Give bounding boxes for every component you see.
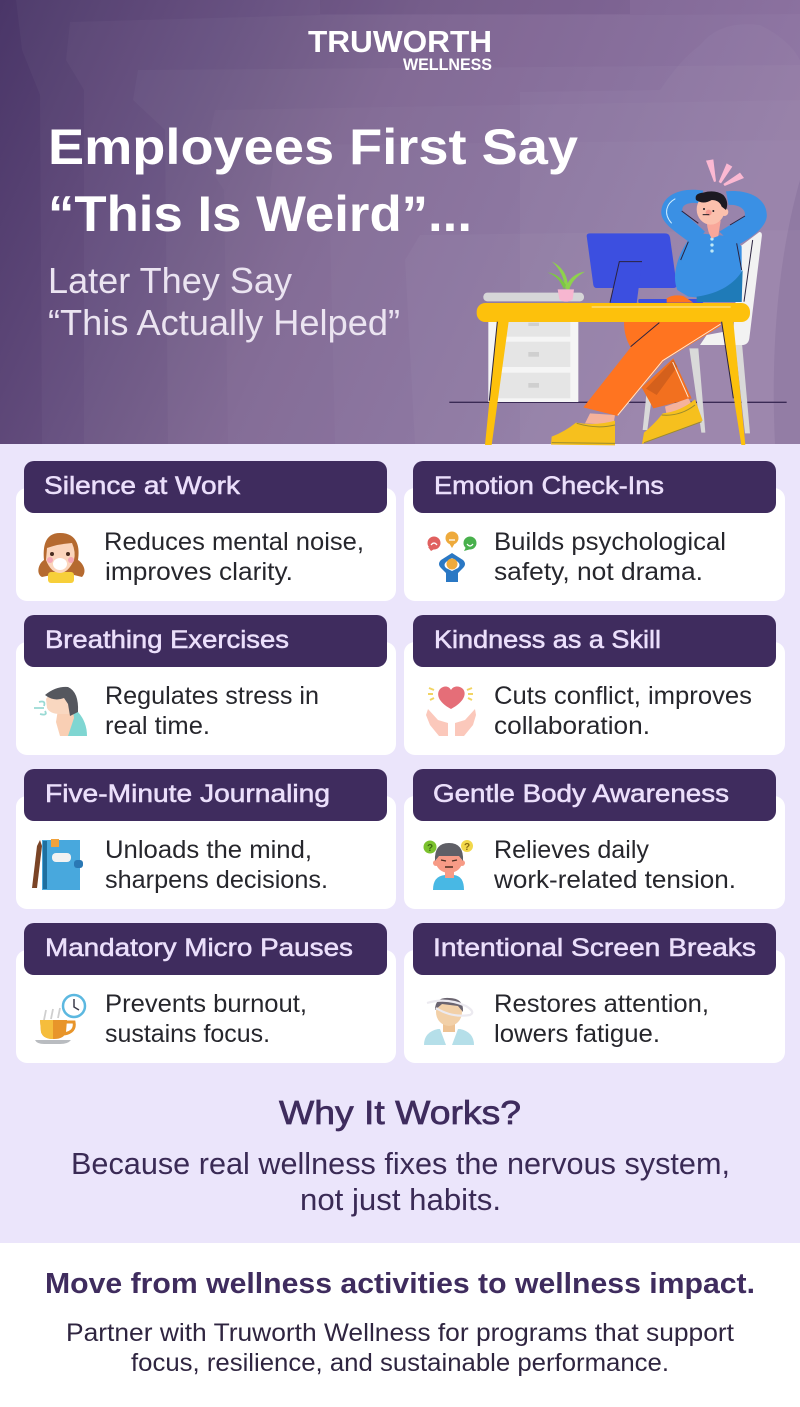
call to action band: Move from wellness activities to wellness impact. bbox=[45, 1268, 755, 1300]
call to action band: Partner with Truworth Wellness for programs that support bbox=[66, 1319, 734, 1347]
panel: Emotion Check-Ins bbox=[404, 461, 785, 601]
illustration: stressed man at desk bbox=[449, 159, 787, 445]
description: real time. bbox=[105, 712, 210, 740]
description: work-related tension. bbox=[493, 866, 736, 894]
description: Cuts conflict, improves bbox=[494, 682, 752, 710]
pants: back leg bbox=[642, 358, 692, 408]
description bbox=[105, 836, 328, 894]
panel: Intentional Screen Breaks bbox=[404, 923, 785, 1063]
panel: Five-Minute Journaling: Five-Minute Journaling bbox=[45, 780, 330, 808]
call to action band bbox=[0, 1243, 800, 1407]
desk bbox=[477, 303, 750, 445]
title: “This Is Weird”... bbox=[48, 186, 472, 242]
arms and head bbox=[661, 190, 767, 270]
icon: person with question marks: ? bbox=[464, 842, 470, 853]
panel: Gentle Body Awareness: Gentle Body Awareness bbox=[433, 780, 729, 808]
shoes bbox=[551, 399, 703, 445]
description bbox=[494, 528, 726, 586]
panel: Kindness as a Skill: Kindness as a Skill bbox=[434, 626, 661, 654]
icon: emotions above a person bbox=[428, 532, 476, 582]
drawers bbox=[488, 320, 578, 402]
icon: person with question marks: ? bbox=[427, 843, 433, 854]
icon: person with question marks bbox=[424, 840, 473, 890]
icon: person exhaling bbox=[34, 687, 87, 736]
panel: Mandatory Micro Pauses: Mandatory Micro Pauses bbox=[45, 934, 353, 962]
icon: dizzy person bbox=[424, 998, 474, 1045]
header banner bbox=[0, 0, 800, 444]
section: Why It Works: Why It Works? bbox=[279, 1094, 521, 1131]
description: improves clarity. bbox=[105, 558, 293, 586]
chair bbox=[643, 232, 762, 433]
panel: Silence at Work: Silence at Work bbox=[44, 472, 241, 500]
stress marks bbox=[706, 159, 744, 186]
description bbox=[494, 990, 709, 1048]
panel: Mandatory Micro Pauses bbox=[16, 923, 396, 1063]
panel: Silence at Work bbox=[16, 461, 396, 601]
description bbox=[104, 528, 364, 586]
panel: Intentional Screen Breaks: Intentional Screen Breaks bbox=[433, 934, 756, 962]
icon: heart in hands bbox=[426, 686, 476, 736]
description: lowers fatigue. bbox=[494, 1020, 660, 1048]
panel: Gentle Body Awareness bbox=[404, 769, 785, 909]
description bbox=[494, 682, 752, 740]
section: Why It Works: not just habits. bbox=[300, 1182, 501, 1217]
subtitle: Later They Say bbox=[48, 260, 292, 301]
title: Employees First Say bbox=[48, 119, 578, 175]
icon: notebook and pencil bbox=[32, 839, 83, 890]
logo: Truworth Wellness: TRUWORTH bbox=[308, 24, 492, 59]
torso bbox=[667, 233, 743, 303]
description: Regulates stress in bbox=[105, 682, 319, 710]
pants: front leg bbox=[583, 322, 721, 416]
section: Why It Works: Because real wellness fixes the nervous system, bbox=[71, 1146, 730, 1181]
description: Relieves daily bbox=[494, 836, 649, 864]
icon: girl covering mouth bbox=[38, 533, 85, 583]
panel: Emotion Check-Ins: Emotion Check-Ins bbox=[434, 472, 664, 500]
monitor bbox=[587, 233, 703, 303]
logo: Truworth Wellness: WELLNESS bbox=[403, 56, 492, 74]
plant bbox=[547, 262, 585, 302]
title bbox=[48, 119, 578, 242]
description: Reduces mental noise, bbox=[104, 528, 364, 556]
description: sharpens decisions. bbox=[105, 866, 328, 894]
description: Restores attention, bbox=[494, 990, 709, 1018]
logo: Truworth Wellness bbox=[308, 24, 492, 74]
panel: Five-Minute Journaling bbox=[16, 769, 396, 909]
icon: coffee cup and clock bbox=[35, 995, 85, 1044]
panel: Breathing Exercises: Breathing Exercises bbox=[45, 626, 289, 654]
description bbox=[493, 836, 736, 894]
description bbox=[105, 682, 319, 740]
call to action band: focus, resilience, and sustainable performance. bbox=[131, 1349, 669, 1377]
description: sustains focus. bbox=[105, 1020, 270, 1048]
section: Why It Works bbox=[71, 1094, 730, 1217]
subtitle: “This Actually Helped” bbox=[48, 302, 400, 343]
description: collaboration. bbox=[494, 712, 650, 740]
description: Builds psychological bbox=[494, 528, 726, 556]
description: Prevents burnout, bbox=[105, 990, 307, 1018]
description: Unloads the mind, bbox=[105, 836, 312, 864]
subtitle bbox=[48, 260, 400, 343]
panel: Breathing Exercises bbox=[16, 615, 396, 755]
description bbox=[105, 990, 307, 1048]
books bbox=[483, 293, 584, 301]
panel: Kindness as a Skill bbox=[404, 615, 785, 755]
description: safety, not drama. bbox=[494, 558, 703, 586]
ankles bbox=[585, 398, 693, 425]
